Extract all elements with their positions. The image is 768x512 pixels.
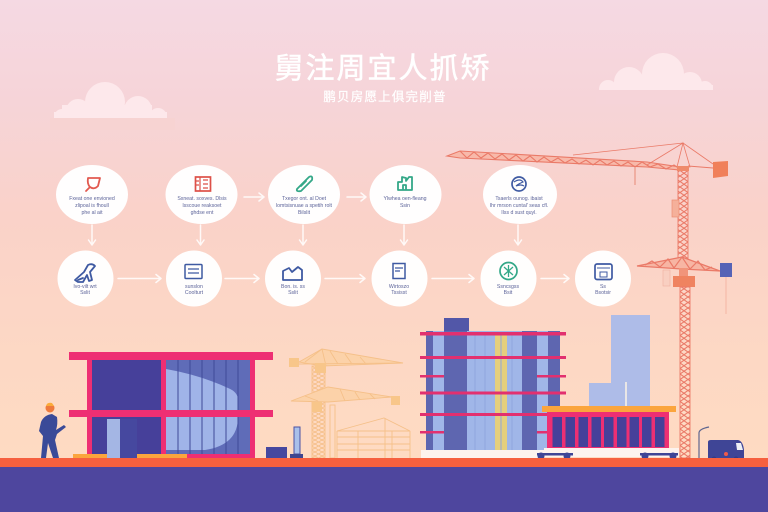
node 1: zlipoal is fhoull: [75, 203, 109, 209]
node 10: Bsit: [504, 290, 513, 296]
second jib: [637, 257, 726, 314]
distant cranes: [289, 349, 410, 458]
lamp post: [699, 427, 709, 458]
clip cloud bases: [50, 118, 175, 130]
cloud: left: [54, 82, 167, 126]
glass panel: [164, 358, 251, 456]
icon: factory: [283, 267, 302, 280]
node 2: [166, 165, 238, 224]
subtitle: 鹏贝房愿上俱完削普: [323, 89, 447, 104]
node 6: [58, 250, 114, 306]
node 8: [265, 250, 321, 306]
node 1: phe al ait: [81, 210, 103, 216]
node 3: [268, 165, 340, 224]
glass facade: [426, 331, 560, 450]
crane counterweight: [713, 161, 728, 178]
box: [266, 447, 287, 459]
node 5: Ihr mrson cuntal' seas cfl.: [490, 203, 548, 209]
node 4: Ssin: [400, 203, 410, 209]
node 3: Txegor ont. al Doet: [282, 196, 327, 202]
white base: [421, 450, 544, 458]
tower crane: large: [447, 143, 732, 458]
icon: list: [196, 177, 210, 191]
node 9: Tssisst: [391, 290, 407, 296]
node 11: Ss: [600, 284, 606, 290]
windows: [552, 417, 664, 447]
icon: tool: [86, 178, 100, 191]
node 5: Tsaerls ounog. ibaist: [495, 196, 543, 202]
icon: excavator: [75, 264, 95, 282]
cloud: right: [599, 53, 713, 98]
ground: [0, 458, 768, 512]
node 11: Bsotsir: [595, 290, 611, 296]
building: pink frame: [69, 352, 273, 459]
building: background blue blocks: [589, 315, 650, 407]
node 4: Ylwhea oen-fleang: [384, 196, 427, 202]
node 10: [480, 250, 536, 306]
blue box: [720, 263, 732, 277]
node 9: [372, 250, 428, 306]
dark columns: [426, 331, 560, 450]
node 10: Ssncsgss: [497, 284, 520, 290]
dark panels: [90, 358, 163, 456]
head: [46, 404, 54, 412]
icon: document plant: [398, 177, 412, 190]
distant crane A: [289, 349, 403, 458]
glass reflection upper: [166, 369, 238, 410]
distant frame building: [337, 418, 410, 458]
node 6: Ivo-vilt wrt: [73, 284, 97, 290]
icon: panel: [185, 264, 202, 278]
crane tower lower: [680, 287, 690, 458]
node 9: Wirtoszo: [389, 284, 409, 290]
node 11: [575, 250, 631, 306]
icon: circular green: [500, 262, 517, 280]
post: [290, 427, 303, 459]
node 2: Sxneat. soxves. Dlsis: [177, 196, 227, 202]
node 1: Fxeat one envioned: [69, 196, 115, 202]
door dark: [120, 419, 137, 458]
node 8: Sslit: [288, 290, 298, 296]
crane tower upper: [678, 168, 688, 260]
node 1: [56, 165, 128, 224]
body: [39, 414, 66, 458]
node 7: Coolturt: [185, 290, 204, 296]
arrows: [88, 193, 569, 282]
van: [708, 440, 744, 462]
icon: pencil: [297, 176, 312, 191]
flatbed trucks: [537, 452, 678, 460]
building: low red hall: [542, 406, 679, 457]
crane jib: [447, 143, 713, 185]
building: multi-storey: [420, 318, 566, 458]
node 7: [166, 250, 222, 306]
crane cab: [672, 200, 679, 217]
yellow strip: [495, 335, 507, 450]
top block: [444, 318, 469, 333]
node 5: [483, 165, 557, 224]
platform: [673, 276, 695, 287]
icon: window: [595, 264, 612, 280]
icon: report: [393, 264, 405, 278]
node 3: Bilslit: [298, 210, 311, 216]
node 7: sunslon: [185, 284, 203, 290]
title: 舅注周宜人抓矫: [274, 52, 492, 85]
node 6: Sslit: [80, 290, 90, 296]
node 2: lsscoue reaksoet: [183, 203, 222, 209]
node 4: [370, 165, 442, 224]
orange roof: [542, 406, 676, 412]
glass reflection lower: [166, 417, 238, 450]
small equipment: [266, 427, 303, 459]
node 2: ghdse ent: [191, 210, 214, 216]
planks: [73, 454, 107, 459]
slabs and columns: [69, 352, 273, 458]
red body: [547, 412, 669, 448]
process flow: [56, 165, 631, 306]
mullions: [178, 360, 238, 455]
distant crane B: [291, 387, 400, 458]
second crane cab: [663, 270, 670, 286]
white base: [544, 448, 679, 457]
node 8: Bon. is. ss: [281, 284, 305, 290]
tower neck: [679, 268, 688, 276]
node 3: lomtsisnuae a spetih rolt: [276, 203, 333, 209]
floor bars: [420, 332, 566, 434]
icon: globe: [512, 177, 526, 191]
person: [39, 403, 66, 458]
node 5: Ilss d sust quyl.: [501, 210, 537, 216]
door light: [107, 419, 120, 458]
